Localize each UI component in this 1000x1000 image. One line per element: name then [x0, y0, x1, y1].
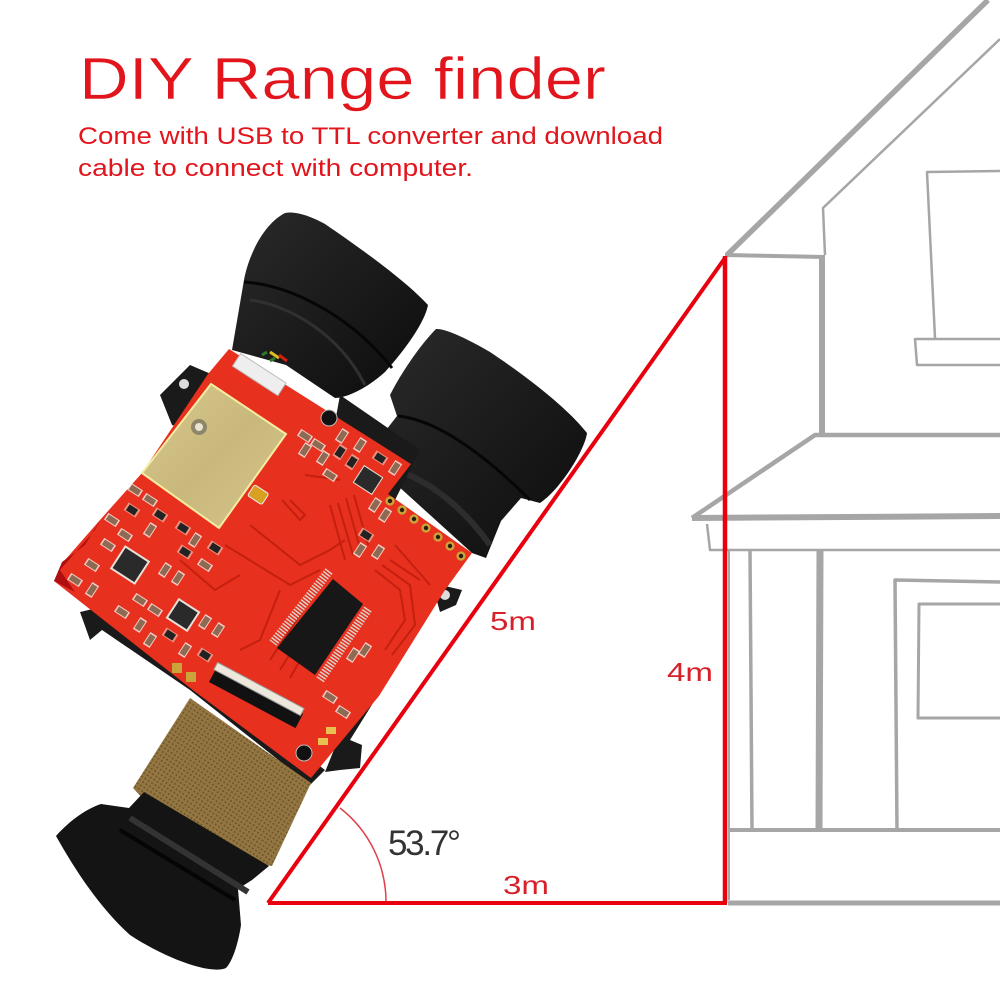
subtitle text: [78, 123, 663, 182]
red measurement triangle: [268, 256, 727, 903]
subtitle text: Come with USB to TTL converter and download: [78, 123, 663, 150]
house line drawing: [692, 0, 1000, 903]
base 3m: [268, 901, 727, 905]
red circuit board: [54, 349, 472, 778]
angle arc: [340, 808, 386, 901]
mounting screws: [296, 410, 337, 761]
surface mount components: [67, 428, 402, 745]
printed traces: [180, 475, 430, 678]
RF shield can: [142, 384, 286, 528]
module chassis and mounting lugs: [80, 365, 462, 785]
label 5m: 5m: [490, 606, 536, 636]
flat cable connector: [209, 662, 304, 728]
objective lens, upper: [232, 213, 428, 398]
label angle: 53.7°: [388, 824, 461, 863]
ICs: [111, 466, 383, 631]
label 4m: 4m: [667, 657, 713, 687]
rangefinder module photo: [54, 213, 587, 970]
wire connector: [233, 352, 287, 396]
tantalum capacitor: [247, 485, 269, 505]
header through-holes: [385, 496, 466, 561]
label 3m: 3m: [503, 870, 549, 900]
subtitle text: cable to connect with computer.: [78, 155, 473, 182]
rubber eyepiece: [56, 792, 269, 970]
title: DIY Range finder: [79, 46, 606, 112]
vertical side 4m: [723, 256, 727, 903]
hypotenuse 5m: [268, 258, 725, 903]
flexible brown cable: [133, 698, 311, 866]
objective lens, lower: [383, 329, 587, 558]
microcontroller chip: [273, 571, 368, 680]
